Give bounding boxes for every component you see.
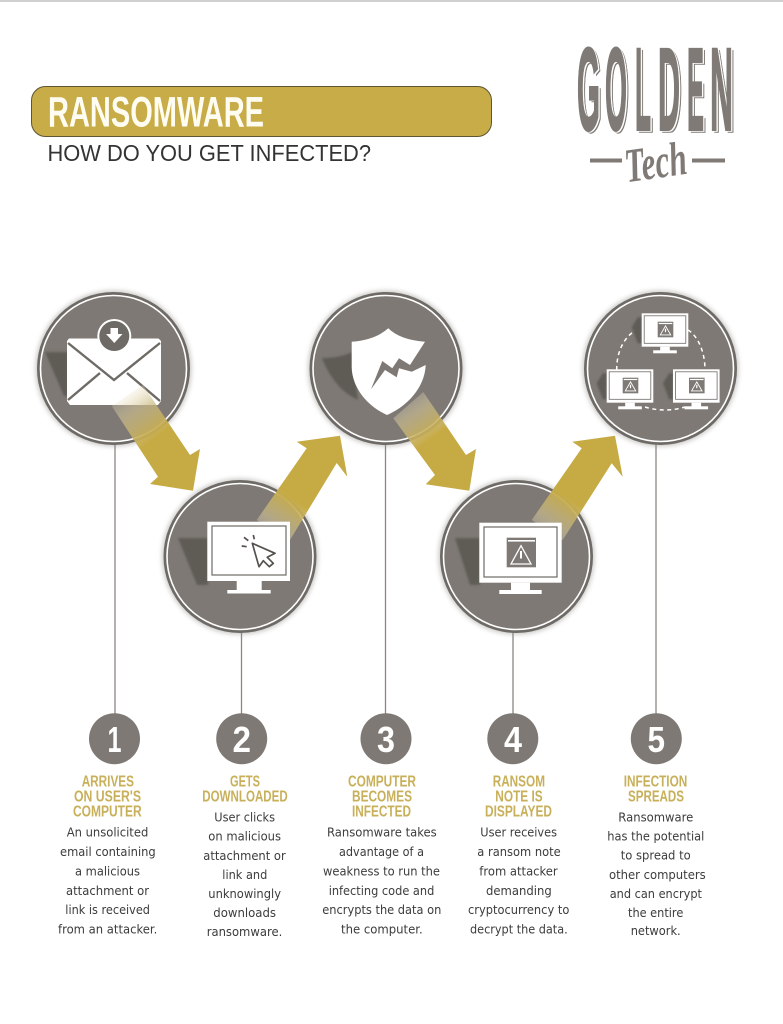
step 4 description: decrypt the data. bbox=[470, 922, 568, 936]
step 5 heading: INFECTION bbox=[624, 774, 687, 791]
step 4 description: from attacker bbox=[479, 864, 559, 878]
step 3 description bbox=[322, 825, 441, 936]
step 4 heading: RANSOM bbox=[493, 774, 545, 791]
step 5 circle: network of infected computers bbox=[582, 290, 738, 446]
number badge 2: 2 bbox=[232, 719, 251, 760]
step 4 description: cryptocurrency to bbox=[468, 902, 569, 917]
number badge 5: 5 bbox=[648, 719, 665, 760]
arrow: step 1 to 2 bbox=[112, 385, 200, 491]
logo: Golden Tech bbox=[577, 24, 735, 193]
step 1 heading: ON USER'S bbox=[74, 789, 141, 806]
icon: monitor with warning window bbox=[479, 523, 562, 594]
connector lines bbox=[115, 444, 656, 716]
step 5 description: network. bbox=[631, 923, 681, 938]
step 2 description: link and bbox=[222, 867, 267, 882]
icon: three monitors bbox=[597, 313, 720, 409]
logo: Golden Tech: Tech bbox=[621, 132, 690, 193]
step 5 heading: SPREADS bbox=[628, 789, 684, 806]
step 2 description: User clicks bbox=[214, 810, 275, 825]
step 2 description: downloads bbox=[213, 905, 276, 920]
step 5 description: and can encrypt bbox=[610, 886, 702, 901]
step 2 description: unknowingly bbox=[208, 886, 281, 901]
step 3 heading: BECOMES bbox=[352, 789, 412, 806]
icon: monitor with cursor bbox=[207, 522, 290, 594]
step 3 circle: broken shield icon bbox=[308, 290, 464, 446]
step 5 description bbox=[607, 810, 706, 938]
step 3 description: the computer. bbox=[341, 922, 423, 936]
step 1 heading: COMPUTER bbox=[73, 804, 142, 821]
step 2 description: attachment or bbox=[203, 848, 287, 863]
title banner bbox=[32, 86, 492, 136]
step 5 description: to spread to bbox=[621, 848, 691, 862]
step 4 description: User receives bbox=[480, 825, 557, 840]
icon: envelope bbox=[67, 319, 161, 405]
step 4 circle bbox=[438, 478, 594, 634]
number badge 3 bbox=[360, 713, 412, 764]
step 2 heading: DOWNLOADED bbox=[202, 789, 288, 806]
step 1 description: attachment or bbox=[66, 883, 150, 898]
step 1 description: link is received bbox=[65, 902, 150, 917]
number badge 1: 1 bbox=[108, 719, 122, 760]
arrow: step 4 to 5 bbox=[532, 436, 623, 540]
step 1 circle: envelope icon bbox=[36, 290, 192, 446]
number badge 1 bbox=[89, 713, 140, 764]
number badge 4 bbox=[487, 713, 538, 764]
step 3 description: infecting code and bbox=[329, 883, 434, 898]
step 1 description: email containing bbox=[60, 844, 156, 859]
step 1 description bbox=[58, 825, 157, 936]
step 4 description: demanding bbox=[486, 883, 552, 898]
step 4 heading bbox=[485, 774, 552, 821]
step 5 description: Ransomware bbox=[618, 810, 693, 825]
number badge 4: 4 bbox=[504, 719, 522, 760]
step 2 circle bbox=[162, 478, 318, 634]
step 1 heading bbox=[73, 774, 142, 821]
number badge 3: 3 bbox=[377, 719, 395, 760]
subtitle: HOW DO YOU GET INFECTED? bbox=[48, 140, 371, 166]
step 5 description: has the potential bbox=[607, 828, 704, 844]
step 2 heading bbox=[202, 774, 288, 806]
step 4 heading: DISPLAYED bbox=[485, 804, 552, 821]
icon: dashed network ring bbox=[617, 329, 705, 410]
step 5 heading bbox=[624, 774, 687, 806]
arrow: step 2 to 3 bbox=[257, 436, 347, 540]
title banner: RANSOMWARE bbox=[48, 88, 264, 136]
icon: cracked shield bbox=[352, 328, 426, 415]
step 1 description: from an attacker. bbox=[58, 922, 157, 936]
step 1 description: a malicious bbox=[75, 864, 140, 878]
step 2 description: ransomware. bbox=[207, 924, 282, 939]
arrow: step 3 to 4 bbox=[393, 392, 476, 491]
step 3 description: advantage of a bbox=[339, 844, 424, 859]
step 2 description: on malicious bbox=[208, 829, 281, 844]
step 3 heading: COMPUTER bbox=[348, 774, 416, 791]
step 4 description bbox=[468, 825, 569, 936]
step 1 heading: ARRIVES bbox=[82, 774, 134, 791]
step 3 description: Ransomware takes bbox=[327, 825, 437, 840]
step 3 description: weakness to run the bbox=[323, 864, 440, 878]
step 4 description: a ransom note bbox=[477, 844, 561, 859]
step 1 description: An unsolicited bbox=[67, 825, 148, 840]
step 2 description bbox=[203, 810, 287, 939]
step 5 description: the entire bbox=[628, 905, 683, 920]
step 2 heading: GETS bbox=[230, 774, 260, 791]
step 5 description: other computers bbox=[609, 867, 706, 882]
step 3 description: encrypts the data on bbox=[322, 902, 441, 917]
top border line bbox=[0, 0, 783, 2]
step 4 heading: NOTE IS bbox=[495, 789, 543, 806]
step 3 heading: INFECTED bbox=[352, 804, 411, 821]
number badge 5 bbox=[631, 713, 682, 764]
number badge 2 bbox=[216, 713, 267, 764]
step 3 heading bbox=[348, 774, 416, 821]
